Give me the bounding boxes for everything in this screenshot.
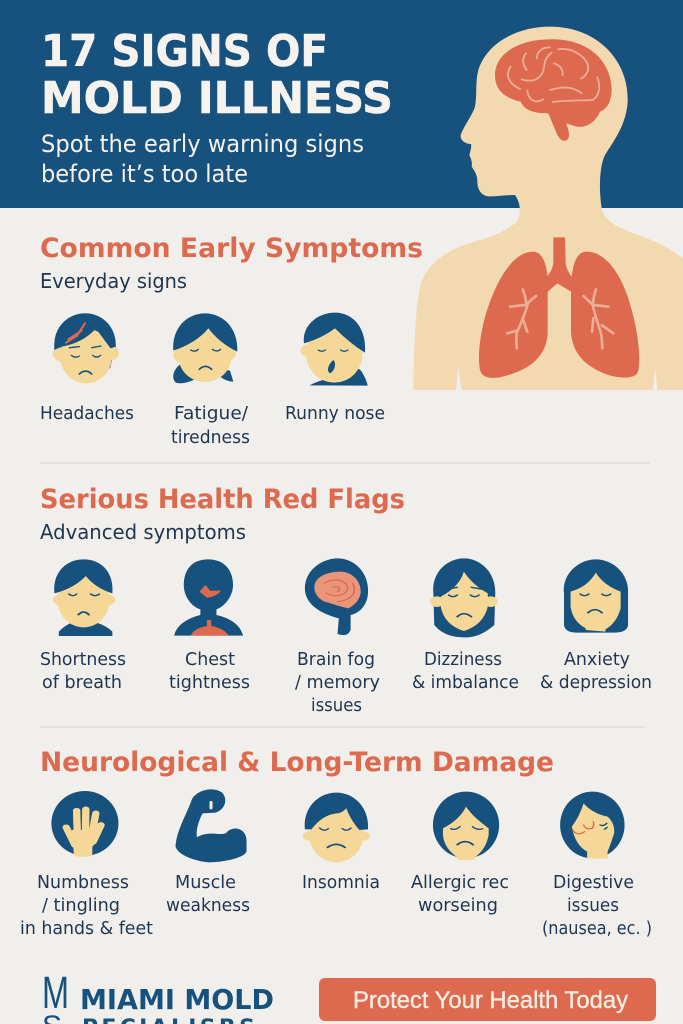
human silhouette with brain and lungs [413, 27, 683, 390]
label: chest tightness: Chest [185, 650, 235, 670]
section heading: neurological and long-term damage: Neurological & Long-Term Damage [40, 747, 554, 778]
label: brain fog: Brain fog [297, 650, 375, 670]
header banner [0, 0, 683, 208]
icon: chest tightness figure [174, 559, 243, 636]
label: muscle weakness: Muscle [175, 873, 236, 893]
icon: runny nose face [301, 313, 368, 386]
label: shortness of breath: of breath [42, 673, 122, 693]
icon: lungs [479, 237, 639, 378]
section heading: serious health red flags: Serious Health Red Flags [40, 484, 405, 515]
label: insomnia: Insomnia [302, 873, 380, 893]
label: digestive issues [542, 873, 652, 939]
label: anxiety: & depression [540, 673, 652, 693]
label: muscle weakness: weakness [166, 896, 250, 916]
label: brain fog: issues [311, 696, 362, 716]
icon: fatigue face [173, 313, 237, 383]
label: brain fog [295, 650, 380, 716]
subtitle: before it’s too late [41, 160, 248, 188]
call to action button [319, 978, 656, 1021]
title: MOLD ILLNESS [41, 73, 393, 124]
icon: dizziness face [430, 558, 498, 637]
label: dizziness [412, 650, 519, 693]
label: digestive issues: Digestive [553, 873, 634, 893]
title: 17 SIGNS OF [41, 26, 328, 77]
subheading: everyday signs: Everyday signs [40, 269, 187, 293]
label: numbness: in hands & feet [20, 919, 153, 939]
label: chest tightness [169, 650, 250, 693]
label: dizziness: Dizziness [424, 650, 502, 670]
label: numbness: / tingling [42, 896, 120, 916]
label: brain fog: / memory [295, 673, 380, 693]
logo: miami mold specialists [42, 967, 274, 1024]
icon: flexed muscle [176, 789, 247, 862]
label: muscle weakness [166, 873, 250, 916]
icon: insomnia face [303, 793, 370, 862]
icon: headache face [53, 313, 119, 383]
label: allergic reactions: Allergic rec [411, 873, 509, 893]
subheading: advanced symptoms: Advanced symptoms [40, 520, 246, 544]
label: headaches: Headaches [40, 404, 134, 424]
icon: digestive issues face [560, 792, 625, 859]
label: digestive issues: (nausea, ec. ) [542, 919, 652, 939]
label: fatigue: Fatigue/ [174, 404, 248, 424]
label: shortness of breath [40, 650, 126, 693]
label: anxiety: Anxiety [564, 650, 630, 670]
label: anxiety [540, 650, 652, 693]
section heading: common early symptoms: Common Early Symptoms [40, 233, 423, 264]
label: allergic reactions: worseing [418, 896, 498, 916]
label: shortness of breath: Shortness [40, 650, 126, 670]
icon: anxiety face [564, 559, 628, 633]
call to action button: Protect Your Health Today [353, 987, 628, 1014]
subtitle [41, 130, 364, 188]
label: runny nose: Runny nose [285, 404, 385, 424]
label: digestive issues: issues [567, 896, 619, 916]
icon: brain fog head [305, 558, 368, 635]
title [41, 26, 393, 124]
label: allergic reactions [411, 873, 509, 916]
label: fatigue: tiredness [171, 428, 250, 448]
icon: shortness of breath face [53, 559, 115, 636]
icon: allergic reaction face [433, 792, 499, 860]
subtitle: Spot the early warning signs [41, 130, 364, 158]
label: fatigue [171, 404, 250, 448]
label: numbness: Numbness [37, 873, 129, 893]
icon: brain [495, 39, 612, 141]
icon: numb hand [51, 791, 118, 857]
label: dizziness: & imbalance [412, 673, 519, 693]
label: chest tightness: tightness [169, 673, 250, 693]
logo: miami mold specialists: MIAMI MOLD [80, 983, 274, 1016]
logo: miami mold specialists: M [42, 967, 69, 1018]
label: numbness [20, 873, 153, 939]
